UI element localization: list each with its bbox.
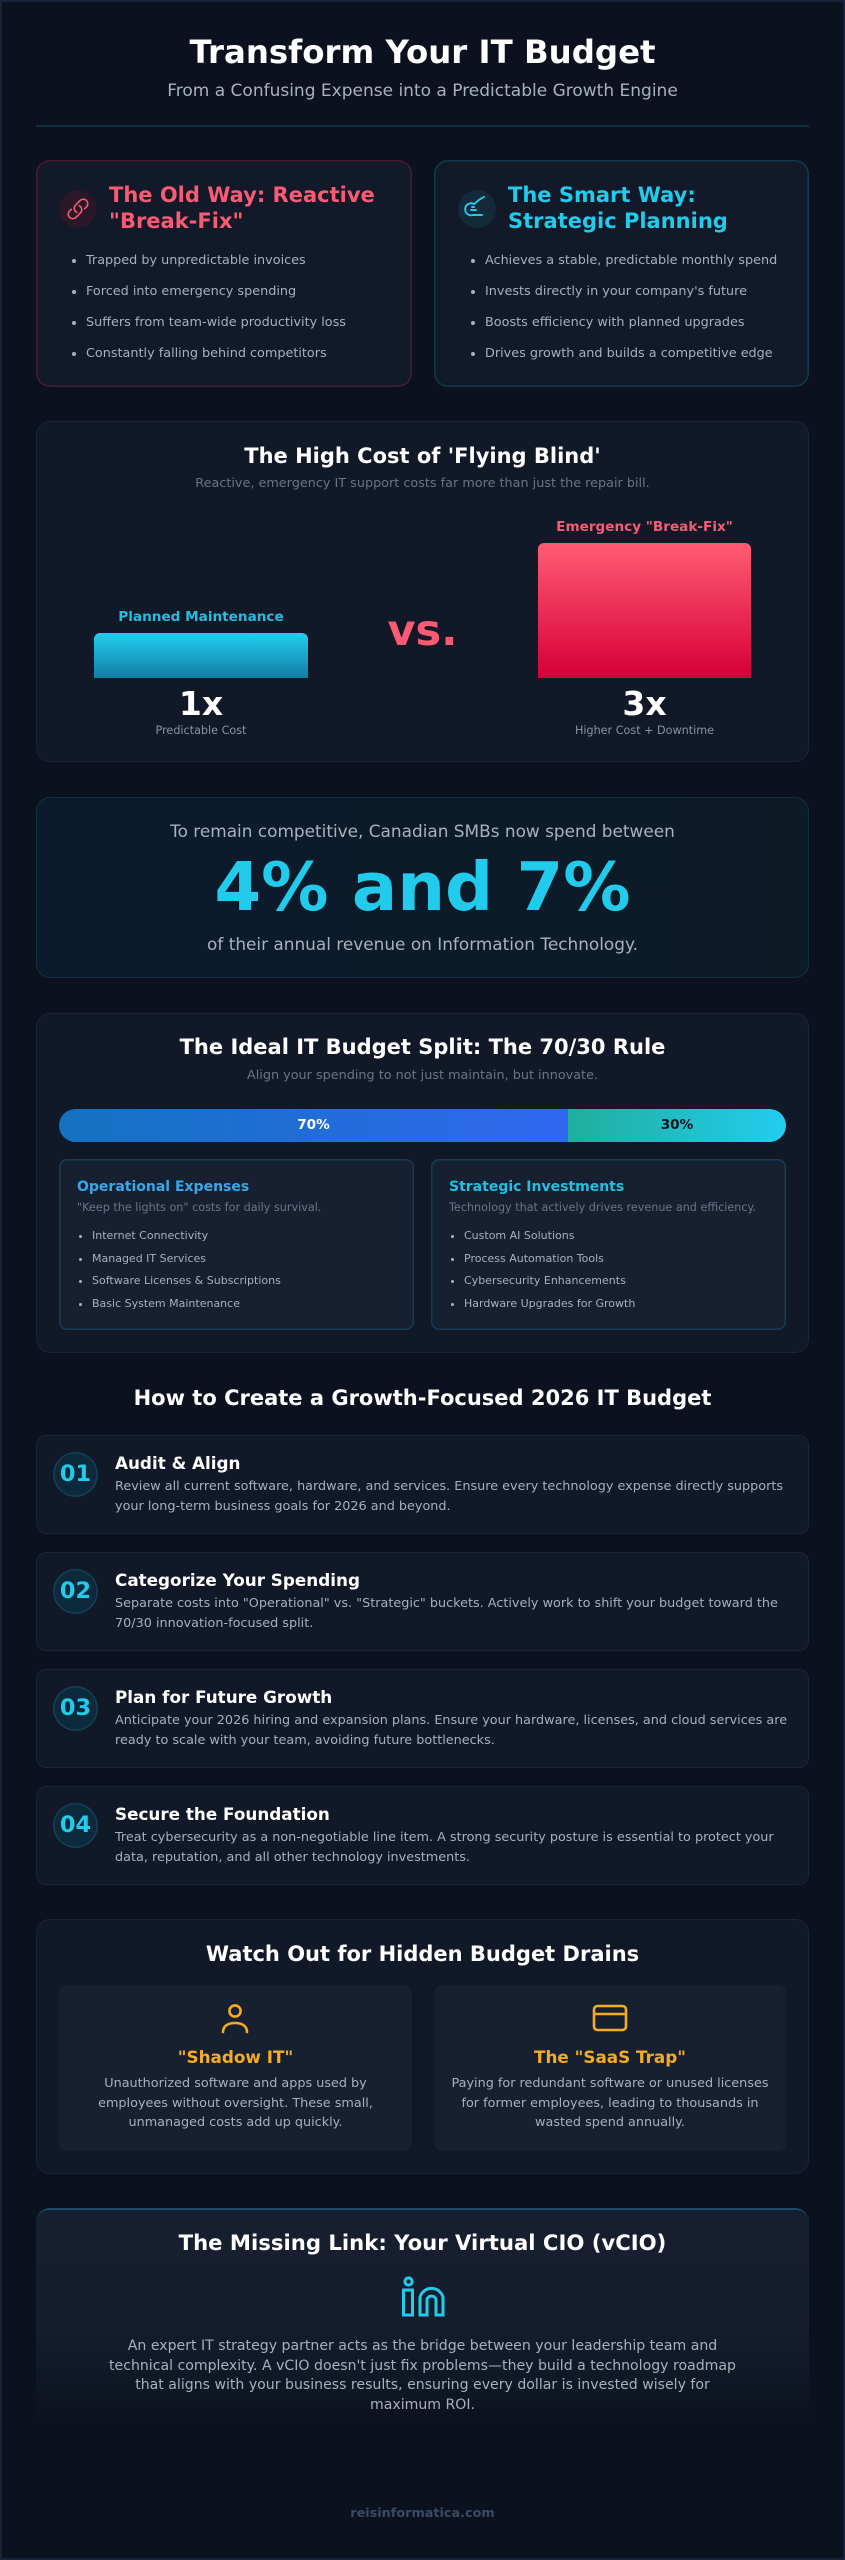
bar label: Emergency "Break-Fix" xyxy=(556,519,733,535)
step description xyxy=(114,1830,774,1865)
heading: The Smart Way: xyxy=(508,183,696,207)
heading: The High Cost of 'Flying Blind' xyxy=(244,444,601,468)
bar: planned maintenance xyxy=(94,609,308,737)
icon: credit card xyxy=(592,2004,628,2032)
text: versus: vs. xyxy=(388,606,457,656)
step number: 01 xyxy=(60,1461,91,1487)
big statistic: 4% and 7% xyxy=(214,848,631,926)
multiplier: 3x xyxy=(622,684,667,723)
card text: employees without oversight. These small, xyxy=(98,2096,373,2111)
card list: Process Automation Tools xyxy=(464,1252,604,1264)
bullet list: Achieves a stable, predictable monthly spend xyxy=(485,253,777,268)
step 4 card xyxy=(36,1786,809,1885)
step title: Audit & Align xyxy=(115,1453,240,1473)
step number: 04 xyxy=(60,1812,91,1838)
heading: The Old Way: Reactive xyxy=(109,183,375,207)
card description: Technology that actively drives revenue and efficiency. xyxy=(449,1201,756,1214)
body text xyxy=(109,2338,736,2413)
footer: reisinformatica.com xyxy=(350,2506,495,2521)
icon: person xyxy=(222,2004,248,2034)
bullet list xyxy=(471,253,777,361)
text: closing line: of their annual revenue on Information Technology. xyxy=(207,934,638,954)
heading: The Ideal IT Budget Split: The 70/30 Rule xyxy=(180,1035,665,1059)
bullet list: Forced into emergency spending xyxy=(86,284,296,299)
segment: 70% xyxy=(59,1109,568,1142)
step number xyxy=(53,1686,98,1731)
body text: maximum ROI. xyxy=(370,2397,475,2413)
card text: for former employees, leading to thousands in xyxy=(461,2096,759,2111)
step number: 02 xyxy=(60,1578,91,1604)
card list: Hardware Upgrades for Growth xyxy=(464,1296,635,1310)
step description: your long-term business goals for 2026 and beyond. xyxy=(115,1499,451,1514)
step description xyxy=(115,1479,783,1514)
card: operational expenses xyxy=(59,1159,414,1330)
icon: broken link xyxy=(59,190,97,228)
subtitle: From a Confusing Expense into a Predictable Growth Engine xyxy=(167,81,678,101)
card text: Unauthorized software and apps used by xyxy=(104,2076,367,2091)
step description: Separate costs into "Operational" vs. "Strategic" buckets. Actively work to shift your budget toward the xyxy=(115,1596,778,1611)
heading: Watch Out for Hidden Budget Drains xyxy=(206,1942,639,1966)
header xyxy=(36,33,809,127)
card text: Paying for redundant software or unused licenses xyxy=(451,2076,769,2091)
card list: Internet Connectivity xyxy=(92,1229,208,1242)
card description: "Keep the lights on" costs for daily survival. xyxy=(77,1201,321,1214)
step description: 70/30 innovation-focused split. xyxy=(115,1616,313,1631)
subheading: Reactive, emergency IT support costs far more than just the repair bill. xyxy=(195,476,650,491)
heading: "Break-Fix" xyxy=(109,209,243,233)
bar shape xyxy=(94,633,308,678)
body text: An expert IT strategy partner acts as the bridge between your leadership team and xyxy=(128,2338,717,2354)
step number xyxy=(53,1452,98,1497)
card text: unmanaged costs add up quickly. xyxy=(128,2115,343,2130)
step number xyxy=(53,1569,98,1614)
card list: Basic System Maintenance xyxy=(92,1296,240,1310)
panel: the smart way xyxy=(434,160,809,387)
card: SaaS trap xyxy=(434,1985,786,2151)
segment: 30%: 30% xyxy=(661,1117,693,1133)
card heading: Strategic Investments xyxy=(449,1179,624,1195)
card list: Custom AI Solutions xyxy=(464,1229,574,1242)
card list xyxy=(79,1229,281,1310)
step number: 03 xyxy=(60,1695,91,1721)
step description: ready to scale with your team, avoiding future bottlenecks. xyxy=(115,1733,495,1748)
bar label: Planned Maintenance xyxy=(118,609,284,625)
segment: 70%: 70% xyxy=(297,1117,330,1133)
card list: Managed IT Services xyxy=(92,1252,206,1264)
heading xyxy=(508,183,728,233)
bullet list xyxy=(72,253,346,361)
step description xyxy=(115,1713,787,1748)
step description: Anticipate your 2026 hiring and expansion plans. Ensure your hardware, licenses, and cloud services are xyxy=(115,1713,787,1728)
heading: The Missing Link: Your Virtual CIO (vCIO) xyxy=(179,2230,666,2255)
panel: virtual CIO xyxy=(36,2208,809,2428)
body text: that aligns with your business results, ensuring every dollar is invested wisely for xyxy=(135,2377,710,2393)
bullet list: Drives growth and builds a competitive edge xyxy=(485,346,773,361)
step 2 card xyxy=(36,1552,809,1651)
heading: Strategic Planning xyxy=(508,209,728,233)
step description xyxy=(115,1596,778,1631)
card: shadow IT xyxy=(59,1985,412,2151)
panel: the old way xyxy=(36,160,412,387)
step title: Plan for Future Growth xyxy=(115,1687,332,1707)
bullet list: Boosts efficiency with planned upgrades xyxy=(485,315,744,330)
card: strategic investments xyxy=(431,1159,786,1330)
step title: Categorize Your Spending xyxy=(115,1570,360,1590)
bar shape xyxy=(538,543,751,678)
panel: high cost comparison xyxy=(36,421,809,762)
body text: technical complexity. A vCIO doesn't just fix problems—they build a technology roadmap xyxy=(109,2358,736,2374)
card heading: The "SaaS Trap" xyxy=(534,2047,686,2067)
subheading: Align your spending to not just maintain, but innovate. xyxy=(247,1068,598,1083)
multiplier: 1x xyxy=(179,684,223,723)
step description: Review all current software, hardware, and services. Ensure every technology expense directly supports xyxy=(115,1479,783,1494)
split bar xyxy=(59,1109,786,1142)
card heading: Operational Expenses xyxy=(77,1179,249,1195)
step 3 card xyxy=(36,1669,809,1768)
bullet list: Suffers from team-wide productivity loss xyxy=(86,315,346,330)
panel: 70/30 rule xyxy=(36,1013,809,1353)
panel: hidden budget drains xyxy=(36,1919,809,2174)
caption: Predictable Cost xyxy=(156,724,246,737)
card heading: "Shadow IT" xyxy=(178,2047,293,2067)
step title: Secure the Foundation xyxy=(115,1804,330,1824)
step 1 card xyxy=(36,1435,809,1534)
card text xyxy=(451,2076,769,2130)
step description: data, reputation, and all other technology investments. xyxy=(115,1850,470,1865)
icon: link / linkedin glyph xyxy=(402,2276,444,2316)
heading xyxy=(109,183,375,233)
card list: Cybersecurity Enhancements xyxy=(464,1274,626,1287)
text: intro line: To remain competitive, Canadian SMBs now spend between xyxy=(170,821,675,841)
section heading: steps: How to Create a Growth-Focused 2026 IT Budget xyxy=(134,1386,711,1410)
card list: Software Licenses & Subscriptions xyxy=(92,1274,281,1287)
bullet list: Constantly falling behind competitors xyxy=(86,346,327,361)
bar: emergency break-fix xyxy=(538,519,751,737)
title: Transform Your IT Budget xyxy=(189,33,656,71)
step description: Treat cybersecurity as a non-negotiable line item. A strong security posture is essential to protect your xyxy=(115,1830,774,1845)
caption: Higher Cost + Downtime xyxy=(575,724,714,737)
card text xyxy=(98,2076,373,2130)
step number xyxy=(53,1803,98,1848)
segment: 30% xyxy=(568,1109,786,1142)
card list xyxy=(451,1229,635,1310)
card text: wasted spend annually. xyxy=(535,2115,685,2130)
icon: strategy xyxy=(458,190,496,228)
bullet list: Trapped by unpredictable invoices xyxy=(86,253,306,268)
panel: spending statistic xyxy=(36,797,809,978)
bullet list: Invests directly in your company's future xyxy=(485,284,747,299)
